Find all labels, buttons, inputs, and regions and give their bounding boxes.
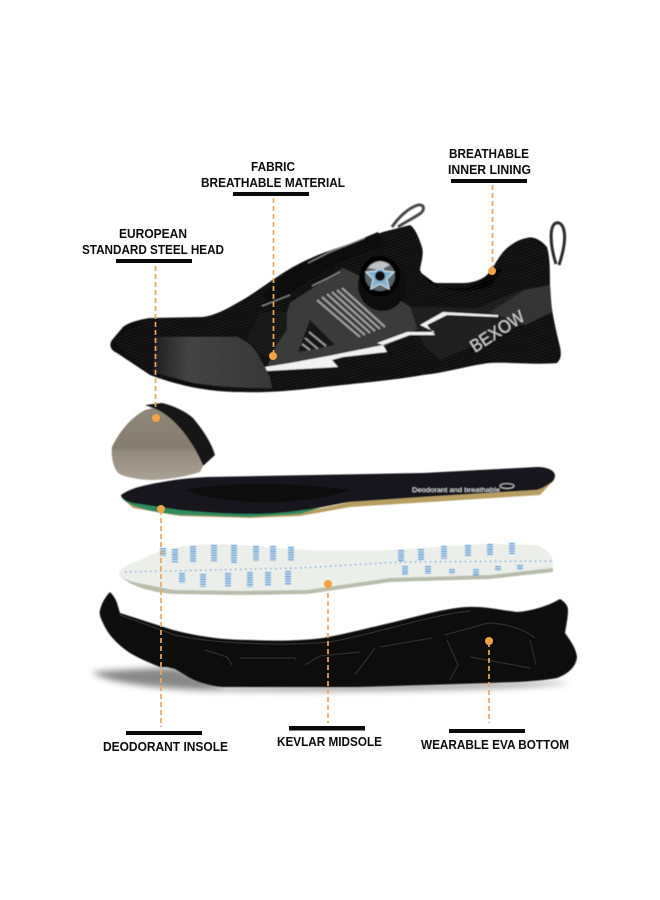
shoe body — [110, 225, 561, 392]
outsole ridges — [120, 611, 536, 680]
label: kevlar midsole: KEVLAR MIDSOLE — [277, 734, 382, 749]
insole print: Deodorant and breathable — [412, 487, 500, 494]
cap rear band — [145, 403, 215, 466]
ground shadow — [92, 668, 570, 691]
heel band — [490, 285, 552, 325]
icon: tongue pull loop — [392, 205, 423, 227]
label: fabric breathable material: FABRIC — [251, 159, 296, 174]
heel collar — [420, 268, 503, 291]
leader: insole — [157, 505, 165, 727]
brand logo: BEXOW — [466, 306, 528, 356]
label: wearable eva bottom — [421, 729, 569, 752]
callout lines and dots — [152, 185, 496, 727]
label: breathable inner lining — [448, 146, 531, 183]
kevlar midsole — [119, 543, 553, 595]
label: fabric breathable material: BREATHABLE MATERIAL — [201, 175, 345, 190]
reflective stripes — [317, 288, 385, 337]
label: breathable inner lining: BREATHABLE — [449, 146, 529, 161]
label: deodorant insole — [103, 731, 228, 754]
label: deodorant insole: DEODORANT INSOLE — [103, 739, 228, 754]
label: breathable inner lining: INNER LINING — [448, 162, 531, 177]
steel toe cap — [112, 403, 215, 480]
cap shell — [112, 408, 203, 480]
deodorant insole — [121, 467, 555, 518]
label: european standard steel head — [82, 226, 224, 263]
triangle badge — [298, 320, 335, 352]
side panel — [267, 268, 430, 367]
lightning stripe — [265, 312, 498, 371]
rear quarter — [410, 285, 551, 360]
insole top — [121, 467, 555, 514]
boa dial — [358, 256, 406, 311]
mesh window — [247, 312, 287, 358]
leader: inner lining — [488, 185, 496, 275]
midsole side edge — [119, 567, 553, 595]
insole green edge — [121, 496, 320, 517]
icon: heel pull loop — [551, 223, 565, 265]
outsole body — [100, 592, 577, 687]
shoe upper — [110, 205, 565, 392]
midsole stitching — [125, 561, 552, 572]
leader: steel head — [152, 266, 160, 422]
label: kevlar midsole — [277, 726, 382, 749]
label: wearable eva bottom: WEARABLE EVA BOTTOM — [421, 737, 569, 752]
midsole top — [119, 544, 553, 591]
label: european standard steel head: EUROPEAN — [119, 226, 187, 241]
insole print badge — [500, 484, 514, 488]
lace highlights — [262, 238, 365, 306]
lace area — [262, 232, 385, 305]
leader: fabric — [269, 198, 277, 360]
insole cork edge — [121, 482, 552, 518]
toe panel — [153, 337, 272, 388]
label: european standard steel head: STANDARD STEEL HEAD — [82, 242, 224, 257]
insole tread shading — [185, 484, 350, 502]
eva outsole — [92, 592, 577, 691]
mesh texture — [112, 225, 560, 392]
leader: eva bottom — [485, 637, 493, 723]
leader: midsole — [324, 580, 332, 723]
midsole blue print — [163, 543, 520, 587]
label: fabric breathable material — [201, 159, 345, 196]
